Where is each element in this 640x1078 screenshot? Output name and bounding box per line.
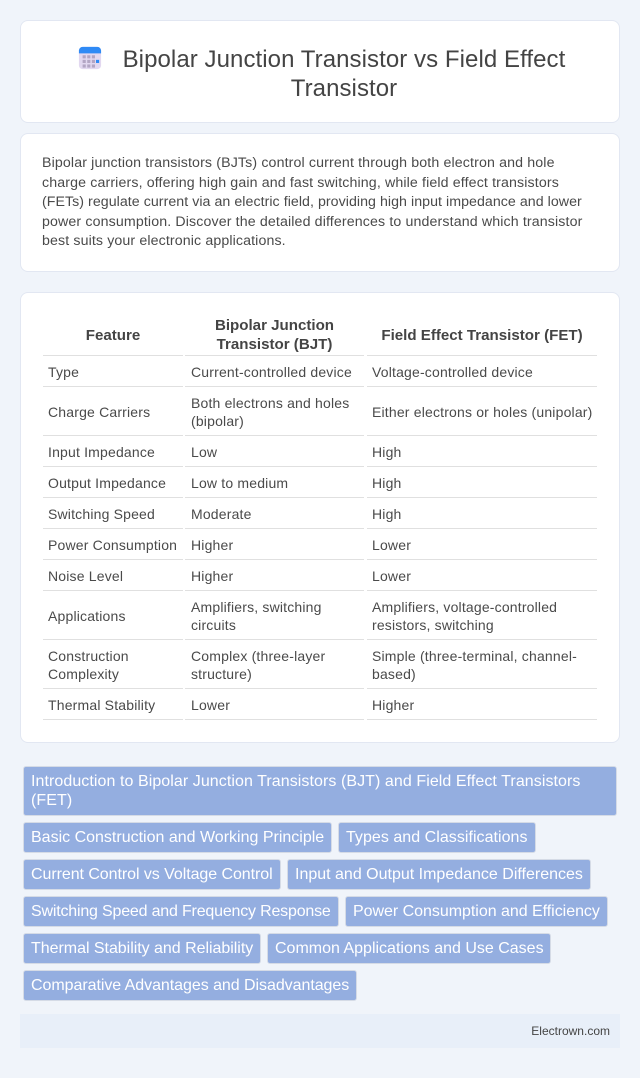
row: input impedance: High [372,444,402,460]
row: type: Type [48,364,79,380]
row: charge carriers [48,395,592,429]
row: charge carriers: Either electrons or holes (unipolar) [372,404,592,420]
intro paragraph: charge carriers, offering high gain and fast switching, while field effect transistors [42,174,559,190]
tag: thermal [23,933,261,964]
row: charge carriers: Both electrons and holes [191,395,349,411]
column headers [86,317,583,353]
tag: thermal: Thermal Stability and Reliability [31,940,253,957]
intro paragraph: best suits your electronic applications. [42,233,286,249]
intro text panel [20,133,620,272]
row: applications: Amplifiers, switching [191,599,322,615]
column headers: Feature [86,327,140,344]
title [123,46,566,102]
header card [20,20,620,123]
row: construction complexity [48,648,577,682]
tag: power: Power Consumption and Efficiency [353,903,600,920]
row: output impedance: High [372,475,402,491]
tag: current control: Current Control vs Voltage Control [31,866,273,883]
intro paragraph [42,155,582,249]
intro paragraph: power consumption. Discover the detailed differences to understand which transistor [42,214,582,230]
row: type: Current-controlled device [191,364,352,380]
row: charge carriers: Charge Carriers [48,404,150,420]
row: type [48,364,533,380]
topic tags [23,766,617,1001]
row: thermal stability: Higher [372,697,414,713]
tag: advantages: Comparative Advantages and Disadvantages [31,977,349,994]
row: switching speed: High [372,506,402,522]
row: construction complexity: Construction [48,648,129,664]
tag: applications: Common Applications and Use Cases [275,940,544,957]
column headers: Field Effect Transistor (FET) [381,327,583,344]
tag: introduction: Introduction to Bipolar Junction Transistors (BJT) and Field Effect Transistors [31,773,580,790]
row: input impedance: Input Impedance [48,444,155,460]
row: construction complexity: Complexity [48,666,119,682]
row: construction complexity: Complex (three-layer [191,648,325,664]
row: applications: resistors, switching [372,617,494,633]
row: power consumption: Lower [372,537,411,553]
row: switching speed: Switching Speed [48,506,155,522]
tag: switching speed [23,896,339,927]
title: Bipolar Junction Transistor vs Field Effect [123,46,565,73]
row: type: Voltage-controlled device [372,364,533,380]
row: input impedance [48,444,402,460]
row: noise level: Lower [372,568,411,584]
tag: switching speed: Switching Speed and Frequency Response [31,903,331,920]
tag: types: Types and Classifications [346,829,528,846]
column headers: Transistor (BJT) [217,336,332,353]
row: construction complexity: based) [372,666,416,682]
row: thermal stability: Thermal Stability [48,697,155,713]
footer [20,1014,620,1048]
row: applications: circuits [191,617,236,633]
title: Transistor [291,75,397,102]
row: applications [48,599,557,633]
row: applications: Amplifiers, voltage-controlled [372,599,557,615]
row: thermal stability: Lower [191,697,230,713]
row: construction complexity: Simple (three-terminal, channel- [372,648,577,664]
comparison table [43,317,597,720]
row: input impedance: Low [191,444,217,460]
tag: basic construction [23,822,332,853]
row: noise level [48,568,411,584]
icon: calendar grid [78,46,102,70]
row: applications: Applications [48,608,126,624]
intro paragraph: Bipolar junction transistors (BJTs) control current through both electron and hole [42,155,555,171]
footer source text: Electrown.com [531,1024,610,1038]
tag: types [338,822,536,853]
row: noise level: Higher [191,568,233,584]
row: construction complexity: structure) [191,666,252,682]
tag: power [345,896,608,927]
tag: impedance: Input and Output Impedance Differences [295,866,583,883]
row: switching speed [48,506,402,522]
intro paragraph: (FETs) regulate current via an electric field, providing high input impedance and lower [42,194,582,210]
tag: advantages [23,970,357,1001]
tag: applications [267,933,551,964]
row: power consumption: Higher [191,537,233,553]
row: thermal stability [48,697,414,713]
row: power consumption [48,537,411,553]
tag: introduction: (FET) [31,792,72,809]
comparison table panel [20,292,620,743]
row: output impedance: Low to medium [191,475,288,491]
column headers: Bipolar Junction [215,317,334,334]
row: power consumption: Power Consumption [48,537,177,553]
tag: current control [23,859,281,890]
row: output impedance: Output Impedance [48,475,166,491]
row: output impedance [48,475,402,491]
tag: impedance [287,859,591,890]
row: noise level: Noise Level [48,568,123,584]
tag: introduction [23,766,617,816]
row: switching speed: Moderate [191,506,252,522]
tag: basic construction: Basic Construction and Working Principle [31,829,324,846]
row: charge carriers: (bipolar) [191,413,244,429]
